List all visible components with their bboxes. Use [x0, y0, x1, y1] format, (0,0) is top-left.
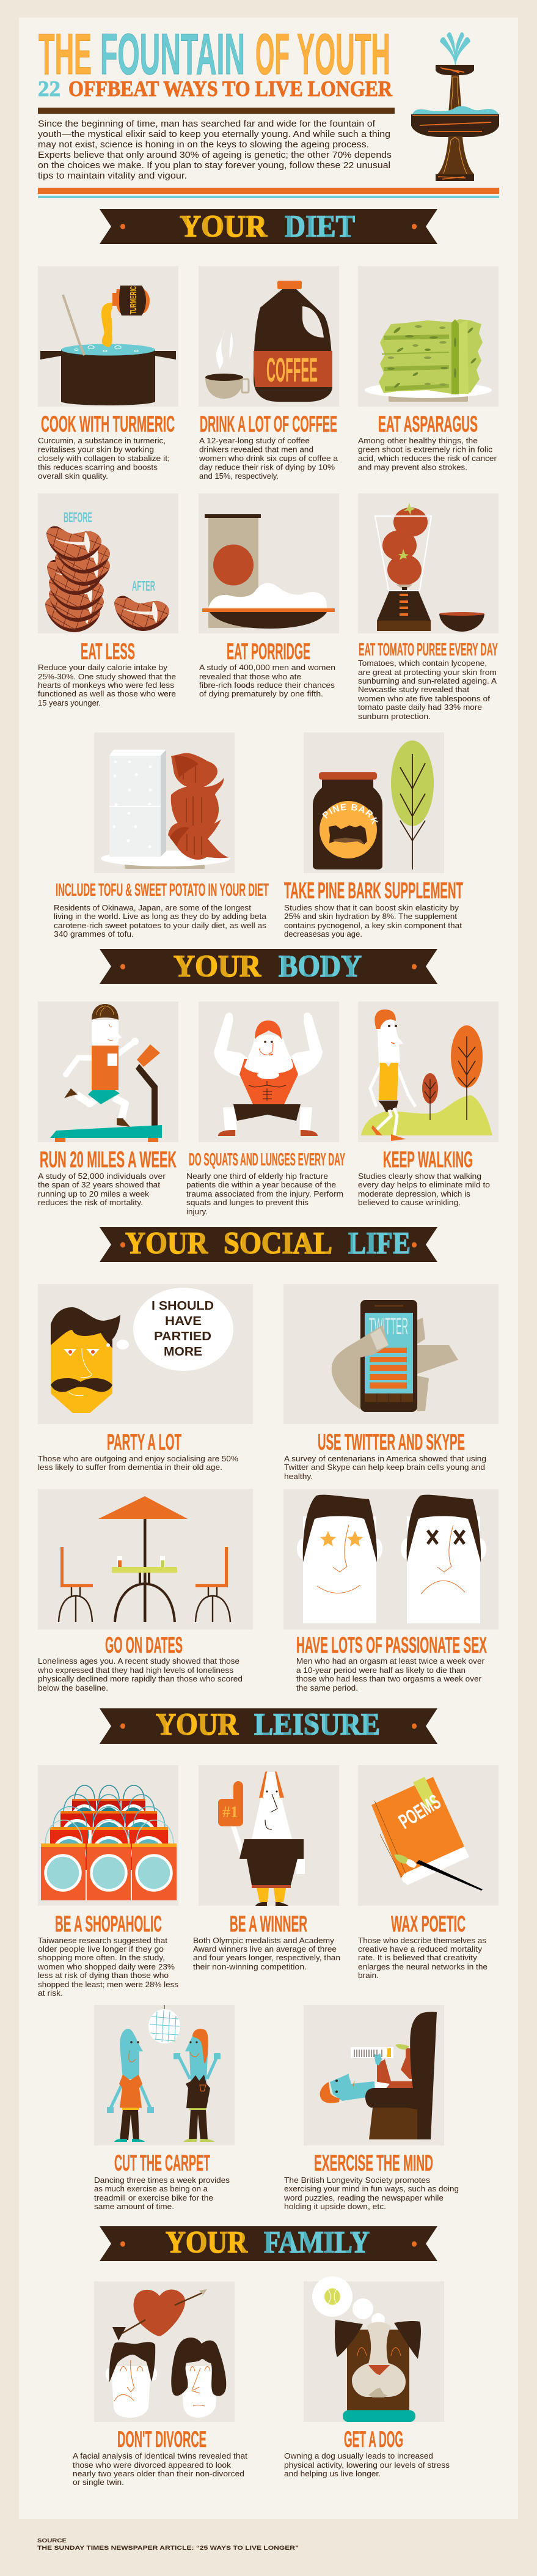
body text: reduces the risk of mortality.	[38, 1198, 143, 1207]
illustration: blender with tomatoes	[375, 503, 484, 632]
text: DO SQUATS AND LUNGES EVERY DAY	[189, 1150, 345, 1170]
illustration: divorced couple and pierced heart	[106, 2289, 226, 2418]
body text: Twitter and Skype can help keep brain cells young and	[284, 1463, 485, 1472]
panel: cook with turmeric	[38, 266, 178, 481]
illustration: upside-down reader in armchair	[320, 2012, 437, 2139]
body text: overall skin quality.	[38, 472, 108, 481]
text: YOUTH	[297, 22, 390, 87]
illustration: tofu and sweet potatoes	[101, 750, 230, 869]
body text	[54, 904, 266, 939]
body text: women who drink six cups of coffee a	[199, 454, 338, 463]
body text	[283, 2176, 459, 2211]
body text: brain.	[358, 1971, 379, 1980]
body text: closely with collagen to stabalize it;	[38, 454, 170, 463]
body text: moderate depression, which is	[358, 1190, 470, 1198]
body text: A study of 400,000 men and women	[199, 663, 335, 672]
body text	[38, 437, 170, 481]
body text: Curcumin, a substance in turmeric,	[38, 437, 166, 445]
body text	[38, 663, 176, 707]
body text: every day helps to eliminate mild to	[358, 1181, 490, 1189]
panel: go on dates: GO ON DATES	[105, 1633, 183, 1658]
banner: your social life: LIFE	[348, 1227, 411, 1261]
illustration: runner on treadmill	[50, 1004, 162, 1142]
body text: Residents of Okinawa, Japan, are some of the longest	[54, 904, 252, 912]
body text: word puzzles, reading the newspaper while	[283, 2194, 444, 2202]
teal rule	[38, 196, 499, 198]
body text: Loneliness ages you. A recent study showed that those	[38, 1657, 239, 1666]
panel: be a winner	[193, 1765, 340, 1971]
body text: and 15%, respectively.	[199, 472, 279, 481]
body text: Those who are outgoing and enjoy socialising are 50%	[38, 1455, 238, 1463]
body text: Nearly one third of elderly hip fracture	[186, 1172, 328, 1181]
body text: less likely to suffer from dementia in their old age.	[38, 1463, 222, 1472]
illustration: asparagus on plate	[365, 319, 492, 402]
body text	[284, 2452, 450, 2478]
body text: women who shopped daily were 23%	[37, 1963, 175, 1971]
title: the fountain of youth: OF	[255, 22, 290, 87]
title: the fountain of youth: FOUNTAIN	[100, 22, 245, 87]
heading: BE A SHOPAHOLIC	[55, 1911, 162, 1936]
body text: rate. It is believed that creativity	[358, 1954, 478, 1962]
speech bubble text: HAVE	[165, 1314, 202, 1328]
body text: as much exercise as being on a	[94, 2185, 208, 2193]
body text: of dying prematurely by one fifth.	[199, 690, 323, 698]
panel: keep walking	[358, 1002, 499, 1207]
body text: Those who describe themselves as	[358, 1936, 486, 1945]
body text: who expressed that they had high levels of loneliness	[37, 1666, 233, 1675]
body text: Newcastle study revealed that	[358, 685, 470, 694]
body text: Studies show that it can boost skin elasticity by	[284, 904, 459, 912]
panel: eat less	[38, 493, 178, 707]
body text: Reduce your daily calorie intake by	[38, 663, 168, 672]
body text	[357, 659, 497, 721]
body text: A 12-year-long study of coffee	[199, 437, 310, 445]
panel: cut the carpet: CUT THE CARPET	[114, 2150, 210, 2176]
panel: eat porridge: EAT PORRIDGE	[227, 639, 310, 664]
banner: your social life: YOUR	[125, 1227, 208, 1261]
body text: physical activity, lowering our levels of stress	[284, 2461, 450, 2470]
body text: fibre-rich foods reduce their chances	[199, 681, 335, 690]
panel: don't divorce: DON'T DIVORCE	[117, 2427, 206, 2452]
body text: acid, which reduces the risk of cancer	[358, 454, 497, 463]
banner: your social life	[100, 1227, 437, 1262]
body text: those who were divorced appeared to look	[73, 2461, 232, 2470]
body text: hearts of monkeys who were fed less	[38, 681, 174, 690]
body text: 15 years younger.	[38, 699, 101, 707]
body text: Taiwanese research suggested that	[38, 1936, 168, 1945]
body text: below the baseline.	[38, 1684, 108, 1692]
panel: drink a lot of coffee: COFFEE	[266, 350, 318, 389]
body text	[38, 1455, 238, 1472]
body text: creative have a reduced mortality	[358, 1945, 483, 1954]
speech bubble text: PARTIED	[154, 1329, 211, 1343]
speech bubble text: MORE	[164, 1345, 202, 1359]
illustration: stacks of steaks: AFTER	[132, 578, 155, 594]
panel: eat tomato puree	[357, 493, 499, 721]
panel: use twitter and skype	[283, 1284, 499, 1481]
illustration: man with foam finger: #1	[222, 1803, 238, 1821]
heading: BE A WINNER	[230, 1911, 307, 1936]
banner: your diet: DIET	[285, 210, 355, 244]
body text: nearly two years older than their non-divorced	[73, 2470, 244, 2478]
body text: those who had less than two orgasms a week over	[296, 1675, 481, 1683]
body text	[37, 1936, 178, 1998]
illustration: dog dreaming of a tennis ball	[312, 2276, 421, 2422]
body text: exercising your mind in fun ways, such as doing	[284, 2185, 459, 2193]
panel: exercise the mind	[283, 2005, 459, 2211]
heading: EXERCISE THE MIND	[314, 2150, 433, 2176]
illustration: poetry book and brush: POEMS	[395, 1790, 445, 1834]
body text: shopping more often. In the study,	[38, 1954, 165, 1962]
body text: revealed that those who ate	[199, 673, 301, 681]
body text: a 10-year period were half as likely to die than	[296, 1666, 466, 1675]
illustration: coffee jug and cup	[205, 281, 332, 402]
banner: your family: FAMILY	[264, 2226, 370, 2260]
banner: your family: YOUR	[166, 2226, 248, 2260]
orange rule	[38, 188, 499, 194]
body text: A facial analysis of identical twins revealed that	[73, 2452, 248, 2460]
speech bubble text	[152, 1299, 214, 1359]
illustration: muscle man squatting	[214, 1013, 323, 1136]
body text: Award winners live an average of three	[193, 1945, 337, 1954]
panel: run 20 miles a week	[38, 1002, 178, 1207]
illustration: man walking outdoors	[361, 1009, 492, 1141]
banner: your leisure	[100, 1708, 437, 1744]
heading: PARTY A LOT	[107, 1430, 181, 1455]
body text: and may prevent also strokes.	[358, 463, 467, 472]
illustration: oats box and bowl	[202, 514, 335, 629]
subtitle: 22 offbeat ways to live longer: OFFBEAT WAYS TO LIVE LONGER	[68, 76, 393, 101]
panel: get a dog	[284, 2276, 450, 2478]
body text	[199, 437, 338, 481]
heading: INCLUDE TOFU & SWEET POTATO IN YOUR DIET	[56, 880, 269, 900]
panel: tofu and sweet potato	[54, 733, 269, 939]
banner: your body: YOUR	[174, 950, 261, 984]
body text: sunburn protection.	[358, 712, 431, 721]
text: DRINK A LOT OF COFFEE	[200, 411, 337, 437]
illustration: poetry book and brush	[371, 1777, 483, 1891]
body text: Studies clearly show that walking	[358, 1172, 481, 1181]
body text: 340 grammes of tofu.	[54, 930, 134, 939]
intro text: Experts believe that only around 30% of ageing is genetic; the other 70% depends	[38, 150, 392, 160]
body text: green shoot is extremely rich in folic	[358, 445, 492, 454]
panel: get a dog: GET A DOG	[344, 2427, 403, 2452]
intro text: youth—the mystical elixir said to keep you eternally young. And while such a thing	[38, 129, 390, 139]
body text	[358, 1936, 488, 1980]
illustration: pine bark jar and leaf	[313, 740, 434, 869]
body text: A survey of centenarians in America showed that using	[284, 1455, 486, 1463]
body text	[358, 1172, 490, 1207]
banner: your diet: YOUR	[180, 210, 268, 244]
body text	[94, 2176, 230, 2211]
illustration: stacks of steaks	[43, 509, 170, 632]
body text	[284, 1455, 486, 1481]
source note: THE SUNDAY TIMES NEWSPAPER ARTICLE: “25 WAYS TO LIVE LONGER”	[37, 2545, 299, 2552]
body text: living in the world. Live as long as they do by adding beta	[54, 912, 266, 921]
body text: revitalises your skin by working	[38, 445, 154, 454]
body text: the span of 32 years showed that	[38, 1181, 161, 1189]
illustration: pot and turmeric: TURMERIC	[128, 286, 139, 314]
body text: Among other healthy things, the	[358, 437, 478, 445]
body text: treadmill or exercise bike for the	[94, 2194, 213, 2202]
panel: squats and lunges	[186, 1002, 345, 1216]
body text: injury.	[186, 1208, 208, 1216]
body text: their non-winning competition.	[193, 1963, 307, 1971]
body text: physically declined more rapidly than those who scored	[38, 1675, 243, 1683]
panel: party a lot	[38, 1284, 253, 1472]
illustration: hand holding phone: TWITTER	[369, 1314, 408, 1340]
body text: decreasesas you age.	[284, 930, 362, 939]
body text: day reduce their risk of dying by 10%	[199, 463, 335, 472]
brown rule under title	[38, 108, 395, 114]
body text: The British Longevity Society promotes	[284, 2176, 430, 2185]
illustration: moustached man with speech bubble	[51, 1288, 233, 1413]
panel: eat porridge	[199, 493, 339, 698]
panel: go on dates	[37, 1489, 253, 1692]
panel: drink a lot of coffee	[199, 266, 339, 481]
body text: women who ate five tablespoons of	[357, 695, 491, 703]
body text	[199, 663, 335, 698]
body text: contains pycnogenol, a key skin component that	[284, 921, 462, 930]
body text	[37, 1657, 243, 1692]
illustration: cafe table with umbrella and chairs	[59, 1496, 230, 1622]
body text: Owning a dog usually leads to increased	[284, 2452, 433, 2460]
panel: be a shopaholic	[37, 1765, 178, 1998]
icon: fountain	[411, 32, 499, 181]
body text	[284, 904, 462, 939]
panel: don't divorce	[73, 2281, 248, 2487]
body text: Dancing three times a week provides	[94, 2176, 230, 2185]
body text: trauma associated from the injury. Perform	[186, 1190, 343, 1198]
banner: your body: BODY	[279, 950, 362, 984]
body text: and helping us live longer.	[284, 2470, 381, 2478]
body text: believed to cause wrinkling.	[358, 1198, 461, 1207]
body text: running up to 20 miles a week	[38, 1190, 150, 1198]
intro text: may not exist, science is honing in on the keys to slowing the ageing process.	[38, 139, 369, 150]
body text: 25%-30%. One study showed that the	[38, 673, 176, 681]
heading: COOK WITH TURMERIC	[41, 411, 175, 437]
body text: same amount of time.	[94, 2202, 174, 2211]
intro text	[38, 119, 392, 181]
body text: 25% and skin hydration by 8%. The supplement	[284, 912, 458, 921]
body text: A study of 52,000 individuals over	[38, 1172, 166, 1181]
body text	[296, 1657, 484, 1692]
panel: pine bark supplement	[284, 733, 463, 939]
body text	[73, 2452, 248, 2487]
body text: holding it upside down, etc.	[284, 2202, 386, 2211]
body text	[193, 1936, 340, 1971]
banner: your leisure: LEISURE	[254, 1708, 380, 1742]
panel: wax poetic	[358, 1765, 499, 1980]
body text	[358, 437, 497, 472]
illustration: stacks of steaks: BEFORE	[64, 509, 92, 525]
title: the fountain of youth: THE	[38, 22, 92, 87]
illustration: dancing couple and disco ball	[107, 2005, 221, 2142]
illustration: pot and turmeric	[40, 286, 176, 405]
body text: drinkers revealed that men and	[199, 445, 313, 454]
body text: patients die within a year because of the	[186, 1181, 336, 1189]
illustration: pine bark jar and leaf: PINE BARK	[322, 803, 378, 825]
illustration: man with foam finger	[218, 1771, 305, 1906]
body text: squats and lunges to prevent this	[186, 1198, 309, 1207]
body text: Both Olympic medalists and Academy	[193, 1936, 335, 1945]
body text: are great at protecting your skin from	[358, 668, 497, 677]
body text: carotene-rich sweet potatoes to your daily diet, as well as	[54, 921, 266, 930]
banner: your body	[100, 949, 437, 984]
body text	[186, 1172, 343, 1216]
source note	[37, 2537, 299, 2552]
body text	[38, 1172, 166, 1207]
heading: WAX POETIC	[391, 1911, 466, 1936]
banner: your social life: SOCIAL	[224, 1227, 332, 1261]
heading: RUN 20 MILES A WEEK	[40, 1147, 177, 1172]
subtitle: 22 offbeat ways to live longer: 22	[38, 76, 60, 101]
banner: your leisure: YOUR	[156, 1708, 239, 1742]
body text: shopped the least; men were 28% less	[38, 1980, 178, 1989]
body text: sunburning and sun-related ageing. A	[358, 677, 497, 685]
illustration: hand holding phone	[332, 1300, 458, 1412]
body text: and four years longer, respectively, than	[193, 1954, 340, 1962]
body text: functioned as well as those who were	[38, 690, 176, 698]
intro text: Since the beginning of time, man has searched far and wide for the fountain of	[38, 119, 376, 129]
speech bubble text: I SHOULD	[152, 1299, 214, 1313]
body text: the same period.	[296, 1684, 358, 1692]
source note: SOURCE	[37, 2537, 67, 2544]
body text: or single twin.	[73, 2478, 124, 2487]
illustration: stacked shopping bags	[41, 1785, 177, 1900]
illustration: happy and sad faces	[297, 1495, 486, 1623]
body text: Men who had an orgasm at least twice a week over	[296, 1657, 484, 1666]
intro text: on the choices we make. If you plan to stay forever young, follow these 22 unusual	[38, 160, 390, 171]
body text: this reduces scarring and boosts	[38, 463, 158, 472]
panel: eat less: EAT LESS	[81, 639, 135, 664]
panel: cut the carpet	[94, 2005, 235, 2211]
body text: tomato paste daily had 33% more	[358, 703, 482, 712]
banner: your diet	[100, 209, 437, 244]
body text: Tomatoes, which contain lycopene,	[358, 659, 487, 668]
banner: your family	[100, 2226, 437, 2261]
panel: have lots of passionate sex	[283, 1489, 499, 1692]
body text: healthy.	[284, 1472, 313, 1481]
body text: older people live longer if they go	[38, 1945, 164, 1954]
panel: eat asparagus	[358, 266, 499, 472]
intro text: tips to maintain vitality and vigour.	[38, 171, 187, 181]
body text: less at risk of dying than those who	[38, 1971, 169, 1980]
body text: enlarges the neural networks in the	[358, 1963, 488, 1971]
body text: at risk.	[38, 1989, 63, 1998]
